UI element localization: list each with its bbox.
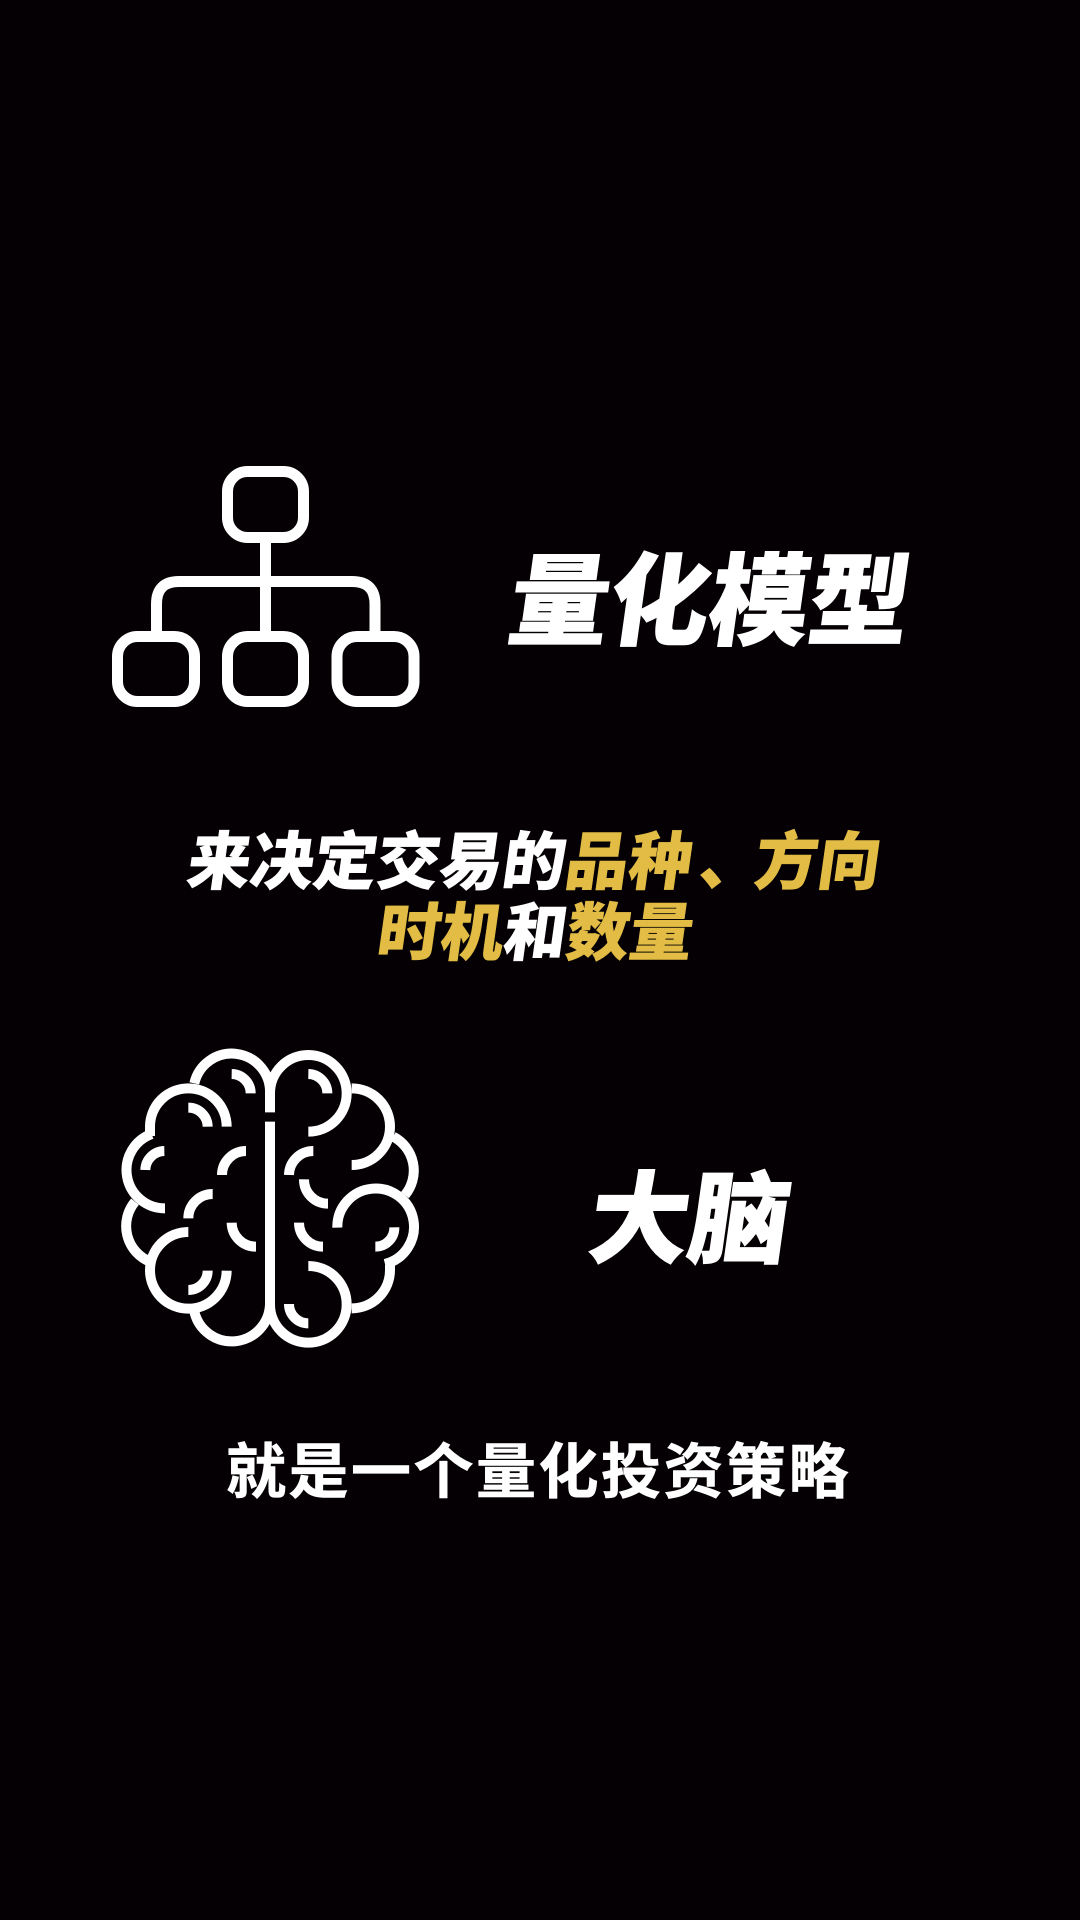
icon: network hierarchy: [112, 466, 420, 707]
title: 量化模型: 量化模型: [502, 547, 918, 659]
text: selection description: 来决定交易的品种、方向: [183, 828, 886, 898]
text: timing and quantity: 时机和数量: [373, 899, 698, 969]
text: brain is a quant strategy: 就是一个量化投资策略: [226, 1439, 851, 1506]
title: 大脑: 大脑: [582, 1165, 798, 1277]
icon: brain: [121, 1048, 420, 1348]
